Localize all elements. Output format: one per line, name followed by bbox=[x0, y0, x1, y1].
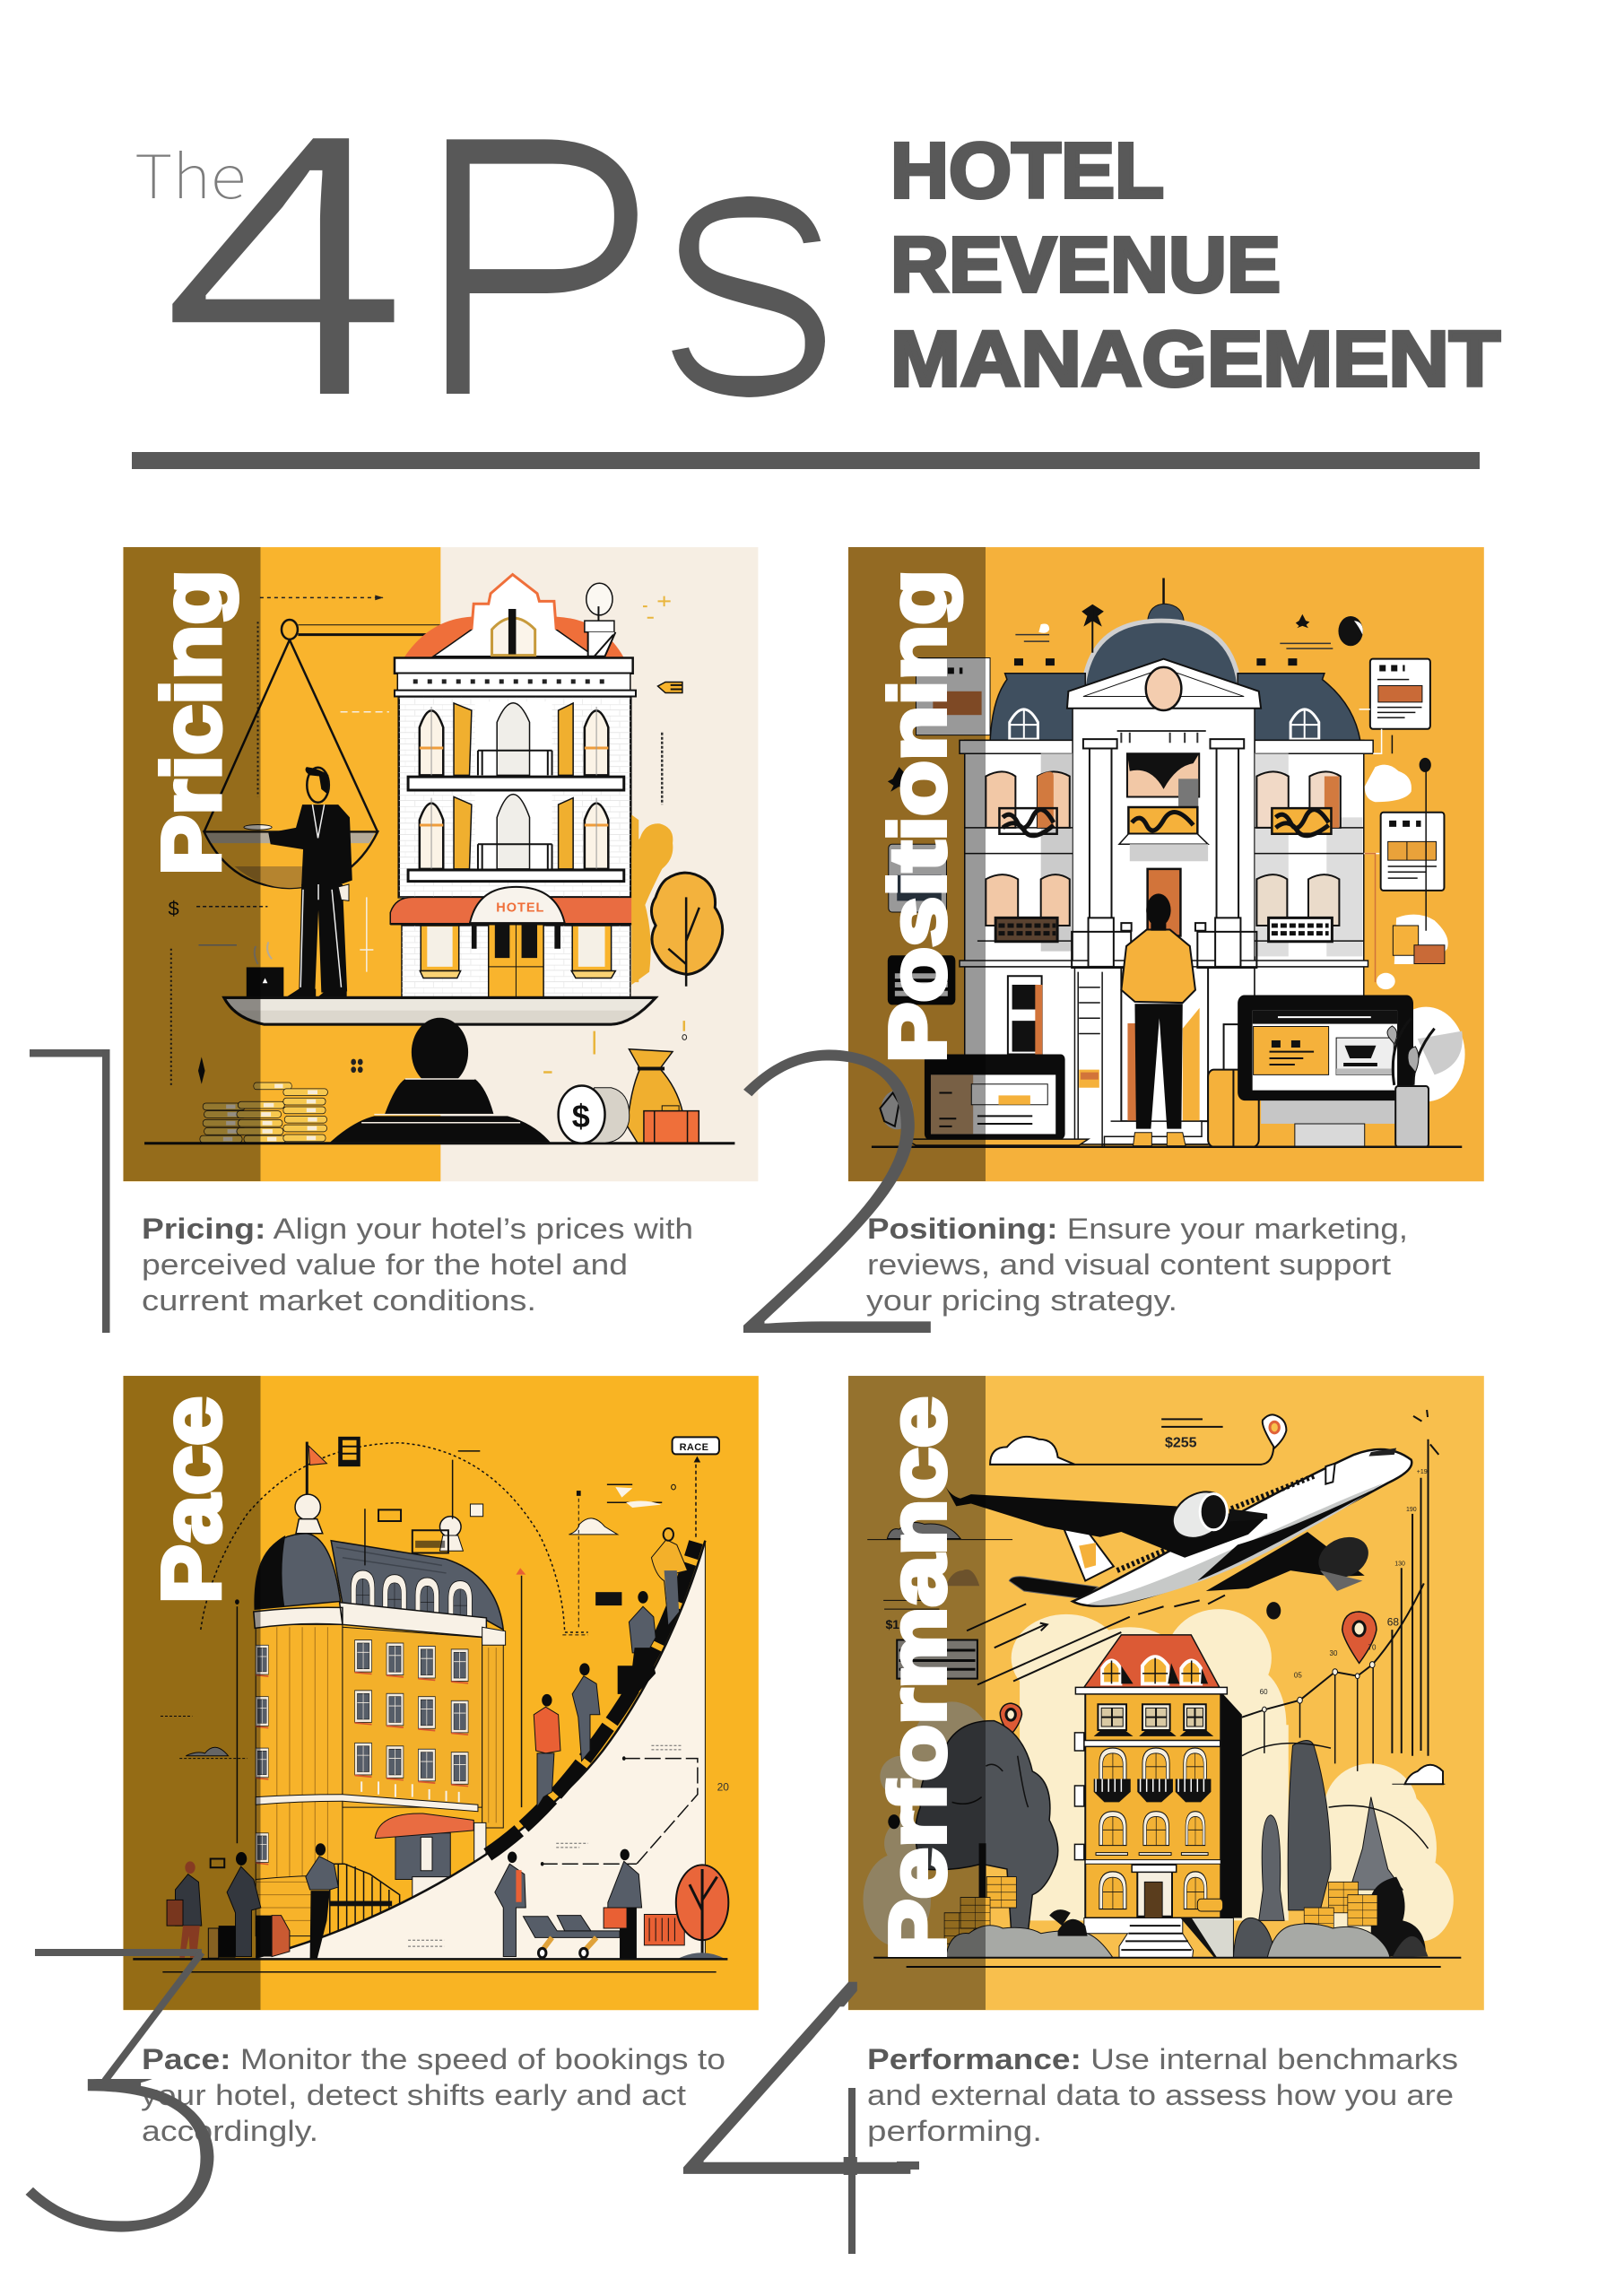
panel: performance bbox=[848, 1376, 1484, 2147]
illustration: scale and hotel: $ bbox=[168, 897, 179, 919]
platform of scale bbox=[224, 997, 656, 1024]
icon: columns bbox=[1072, 739, 1256, 1147]
chart: performance line and numbers: 190 bbox=[1406, 1507, 1417, 1513]
icon: desktop monitor bbox=[1238, 995, 1465, 1147]
icon: hotel roof bbox=[331, 1530, 503, 1630]
chart: booking curve bbox=[256, 1437, 729, 1959]
subtitle: hotel revenue management: MANAGEMENT bbox=[890, 316, 1500, 403]
icon: clouds and price tag bbox=[867, 1414, 1445, 1784]
chart: performance line and numbers: $1 bbox=[885, 1617, 899, 1631]
icon: suitcase bbox=[1208, 1024, 1259, 1147]
chart: performance line and numbers: 30 bbox=[1330, 1649, 1338, 1657]
text block: pace description: Pace: Monitor the speed of bookings to bbox=[142, 2043, 725, 2075]
sidebar band bbox=[848, 1376, 986, 2010]
text block: pricing description bbox=[142, 1213, 693, 1317]
chart: performance line and numbers: 05 bbox=[1294, 1671, 1302, 1679]
icon: trees bbox=[631, 815, 723, 987]
text block: positioning description bbox=[866, 1213, 1408, 1317]
sidebar band bbox=[124, 1376, 260, 2010]
numeral 4 bbox=[683, 1982, 919, 2254]
background details bbox=[133, 1451, 727, 1972]
text block: pace description: your hotel, detect shifts early and act bbox=[141, 2079, 686, 2111]
chart: booking curve: 20 bbox=[717, 1781, 729, 1794]
icon: trees and bushes bbox=[916, 1721, 1429, 1958]
chart: performance line and numbers: 70 bbox=[1368, 1643, 1377, 1651]
sidebar label: Pace: Pace bbox=[146, 1396, 238, 1604]
panel: positioning bbox=[848, 547, 1484, 1317]
icon: balance scale bbox=[204, 620, 462, 888]
numeral 3 bbox=[25, 1949, 213, 2232]
chart: booking curve: RACE bbox=[680, 1442, 708, 1453]
cream clouds bbox=[863, 1609, 1454, 1946]
icon: mansard roof bbox=[990, 674, 1360, 741]
numeral 1 bbox=[30, 1049, 109, 1333]
icon: hotel body bbox=[254, 1603, 506, 1936]
title: The: The bbox=[135, 129, 246, 216]
icon: hotel building: HOTEL bbox=[496, 900, 544, 915]
text block: performance description: Performance: Use internal benchmarks bbox=[867, 2043, 1458, 2075]
text block: pricing description: perceived value for the hotel and bbox=[142, 1248, 628, 1281]
icon: laptop bbox=[247, 942, 283, 997]
icon: hotel building bbox=[1074, 1635, 1242, 1958]
icon: dome bbox=[1083, 621, 1240, 690]
panel: pace bbox=[123, 1376, 759, 2147]
big title: 4Ps bbox=[158, 0, 845, 500]
figure: man in suit bbox=[244, 767, 352, 997]
chart: performance line and numbers: 68 bbox=[1387, 1615, 1399, 1628]
icon: flag and turret bbox=[255, 1437, 463, 1609]
figures: guests at ground bbox=[167, 1843, 728, 1959]
figures: guests climbing bbox=[534, 1528, 688, 1807]
subtitle: hotel revenue management: HOTEL bbox=[890, 127, 1164, 214]
text block: pricing description: Pricing: Align your hotel’s prices with bbox=[142, 1213, 693, 1245]
chart: performance line and numbers: +19 bbox=[1417, 1469, 1428, 1475]
icon: laptop bbox=[880, 1054, 1089, 1145]
chart: performance line and numbers: 130 bbox=[1394, 1561, 1405, 1567]
icon: money bag and suitcase bbox=[559, 1049, 699, 1144]
sidebar band bbox=[848, 547, 986, 1181]
icon: review cards bbox=[888, 657, 1448, 1004]
illustration: hotel and booking curve bbox=[123, 1376, 759, 2010]
sidebar label: Performance: Performance bbox=[873, 1396, 961, 1961]
subtitle: hotel revenue management: REVENUE bbox=[890, 222, 1281, 309]
text block: pricing description: current market conditions. bbox=[142, 1284, 536, 1317]
text block: performance description bbox=[867, 2043, 1458, 2147]
illustration: plane and hotel bbox=[848, 1376, 1484, 2010]
icon: airplane bbox=[943, 1410, 1438, 1756]
icon: building body bbox=[960, 659, 1373, 1147]
text block: positioning description: reviews, and visual content support bbox=[867, 1248, 1391, 1281]
chart: performance line and numbers bbox=[883, 1469, 1428, 1829]
icon: clouds and price tag: $255 bbox=[1165, 1435, 1197, 1450]
numeral 2: 2 bbox=[721, 874, 955, 1448]
big title: 4Ps: Ps bbox=[409, 57, 845, 475]
chart: performance line and numbers: 60 bbox=[1260, 1688, 1268, 1696]
figure: standing guest bbox=[1121, 893, 1195, 1146]
panel: pricing bbox=[123, 547, 758, 1317]
icon: money bag and suitcase: $ bbox=[572, 1098, 590, 1135]
sidebar band bbox=[124, 547, 260, 1181]
icon: coin stacks bbox=[200, 1083, 327, 1143]
text block: performance description: performing. bbox=[867, 2115, 1042, 2147]
title bbox=[135, 0, 1500, 500]
text block: pace description bbox=[141, 2043, 725, 2147]
icon: hotel building bbox=[390, 575, 643, 997]
pedestal bbox=[329, 1018, 552, 1144]
text block: pace description: accordingly. bbox=[142, 2115, 318, 2147]
text block: positioning description: your pricing strategy. bbox=[866, 1284, 1177, 1317]
text block: performance description: and external data to assess how you are bbox=[867, 2079, 1454, 2111]
illustration: grand hotel with guest bbox=[848, 547, 1484, 1181]
icon: windows and balconies bbox=[986, 753, 1341, 1054]
text block: positioning description: Positioning: Ensure your marketing, bbox=[867, 1213, 1408, 1245]
sidebar label: Pricing: Pricing bbox=[146, 570, 238, 875]
sidebar label: Positioning: Positioning bbox=[873, 570, 961, 1063]
illustration: scale and hotel bbox=[123, 547, 758, 1181]
subtitle: hotel revenue management bbox=[890, 127, 1500, 403]
